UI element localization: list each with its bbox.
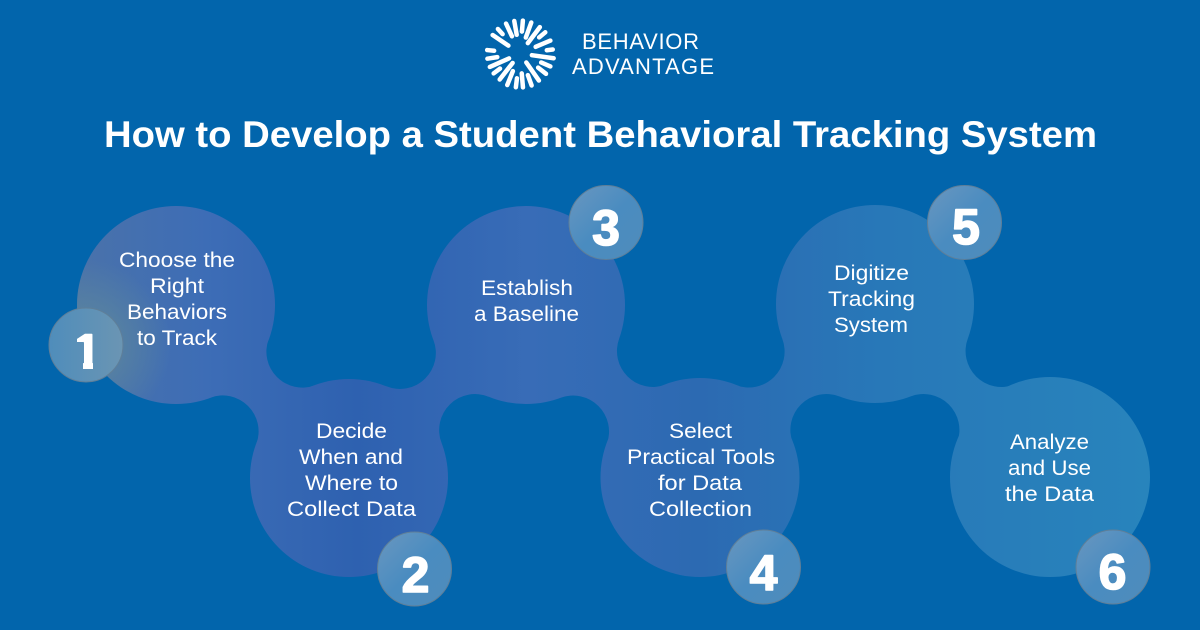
step 1 text: Right xyxy=(150,275,204,298)
badge 2: 2 xyxy=(402,547,429,603)
badge 4 xyxy=(726,530,800,604)
badge 1 xyxy=(49,308,123,382)
step 2 text: When and xyxy=(299,446,403,469)
step 1 text: Choose the xyxy=(119,249,235,272)
logo wordmark: ADVANTAGE xyxy=(572,54,714,79)
badge 6: 6 xyxy=(1099,544,1126,600)
step 1 text: to Track xyxy=(137,327,218,350)
logo wordmark xyxy=(572,29,714,79)
step 6 text: and Use xyxy=(1008,457,1091,480)
step 2 text: Decide xyxy=(316,420,387,443)
step 2 text: Where to xyxy=(305,472,398,495)
title: How to Develop a Student Behavioral Tracking System xyxy=(104,114,1097,155)
connected step blobs xyxy=(77,205,1150,577)
logo: Behavior Advantage xyxy=(487,21,714,87)
step 2 text xyxy=(287,420,416,521)
step 2 text: Collect Data xyxy=(287,498,416,521)
logo wordmark: BEHAVIOR xyxy=(582,29,699,54)
step 5 text: Digitize xyxy=(834,262,909,285)
step 6 text: Analyze xyxy=(1010,431,1089,454)
badge 6 xyxy=(1076,530,1150,604)
step 5 text: Tracking xyxy=(828,288,915,311)
step 5 text: System xyxy=(834,314,908,337)
step 1 text xyxy=(119,249,235,350)
step 3 text xyxy=(474,277,579,326)
step 4 text xyxy=(627,420,775,521)
step 4 text: for Data xyxy=(658,472,742,495)
badge 4: 4 xyxy=(750,545,778,601)
step 1 text: Behaviors xyxy=(127,301,227,324)
step 6 text xyxy=(1005,431,1094,506)
step 6 text: the Data xyxy=(1005,483,1094,506)
badge 3: 3 xyxy=(592,200,620,256)
badge 5: 5 xyxy=(952,199,980,255)
step 3 text: Establish xyxy=(481,277,573,300)
step 3 text: a Baseline xyxy=(474,303,579,326)
step 4 text: Select xyxy=(669,420,732,443)
step 4 text: Practical Tools xyxy=(627,446,775,469)
badge 3 xyxy=(569,186,643,260)
badge 2 xyxy=(378,532,452,606)
badge 1: 1 xyxy=(73,324,101,380)
step 5 text xyxy=(828,262,915,337)
icon: sunburst logo mark xyxy=(487,21,554,87)
step 4 text: Collection xyxy=(649,498,752,521)
badge 5 xyxy=(928,186,1002,260)
